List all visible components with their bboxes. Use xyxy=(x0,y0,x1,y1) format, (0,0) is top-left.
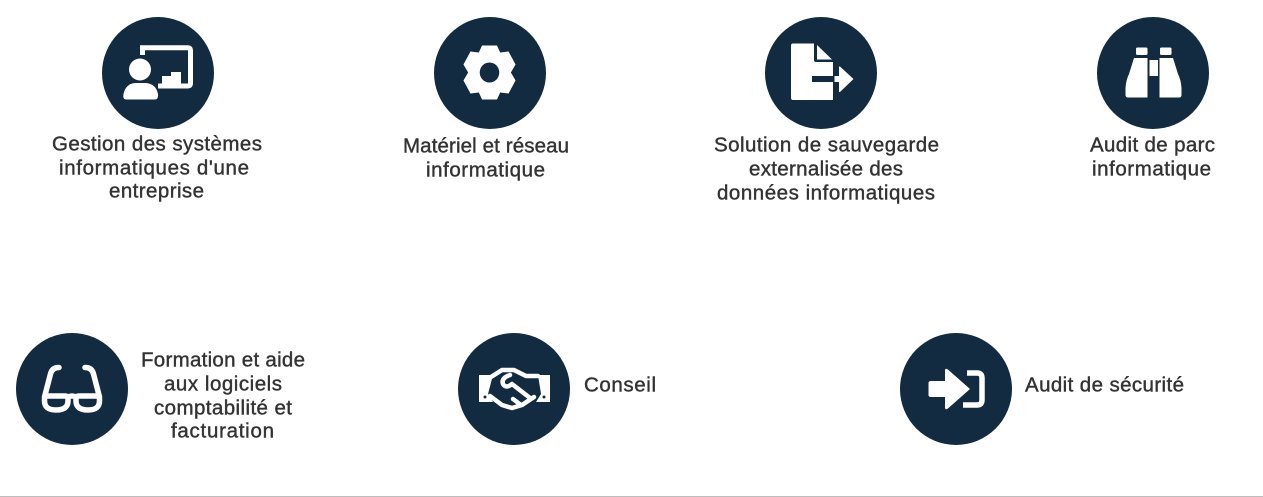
icon: binoculars xyxy=(1097,17,1209,129)
service: audit de sécurité xyxy=(900,333,1184,445)
service: formation et aide: comptabilité et xyxy=(154,396,292,420)
label: Conseil xyxy=(584,374,656,396)
icon: glasses xyxy=(16,333,128,445)
icon: gear xyxy=(434,17,546,129)
label: Audit de sécurité xyxy=(1025,374,1184,396)
label: Solution de sauvegarde xyxy=(714,134,939,156)
icon: handshake xyxy=(458,333,570,445)
label: Formation et aide xyxy=(141,348,305,372)
service: conseil xyxy=(458,333,656,445)
service: sauvegarde externalisée xyxy=(714,17,939,204)
label: Matériel et réseau xyxy=(403,134,569,158)
icon: presentation board and person xyxy=(102,17,214,129)
icon: document with arrow xyxy=(765,17,877,129)
service: audit de parc: informatique xyxy=(1092,158,1211,180)
label: Gestion des systèmes xyxy=(52,132,262,156)
service: audit de parc xyxy=(1090,17,1215,180)
service: gestion des systèmes: entreprise xyxy=(109,180,204,202)
service: formation et aide: facturation xyxy=(171,420,274,442)
service: sauvegarde externalisée: données informatiques xyxy=(717,182,935,204)
service: formation et aide xyxy=(16,333,305,445)
label: Audit de parc xyxy=(1090,134,1215,156)
service: sauvegarde externalisée: externalisée des xyxy=(749,158,903,180)
bottom rule xyxy=(0,496,1263,497)
icon: arrow into bracket xyxy=(900,333,1012,445)
service: matériel et réseau: informatique xyxy=(426,158,545,182)
service: gestion des systèmes: informatiques d'une xyxy=(59,156,249,180)
service: matériel et réseau xyxy=(403,17,569,182)
service: formation et aide: aux logiciels xyxy=(164,372,282,396)
service: gestion des systèmes xyxy=(52,17,262,202)
